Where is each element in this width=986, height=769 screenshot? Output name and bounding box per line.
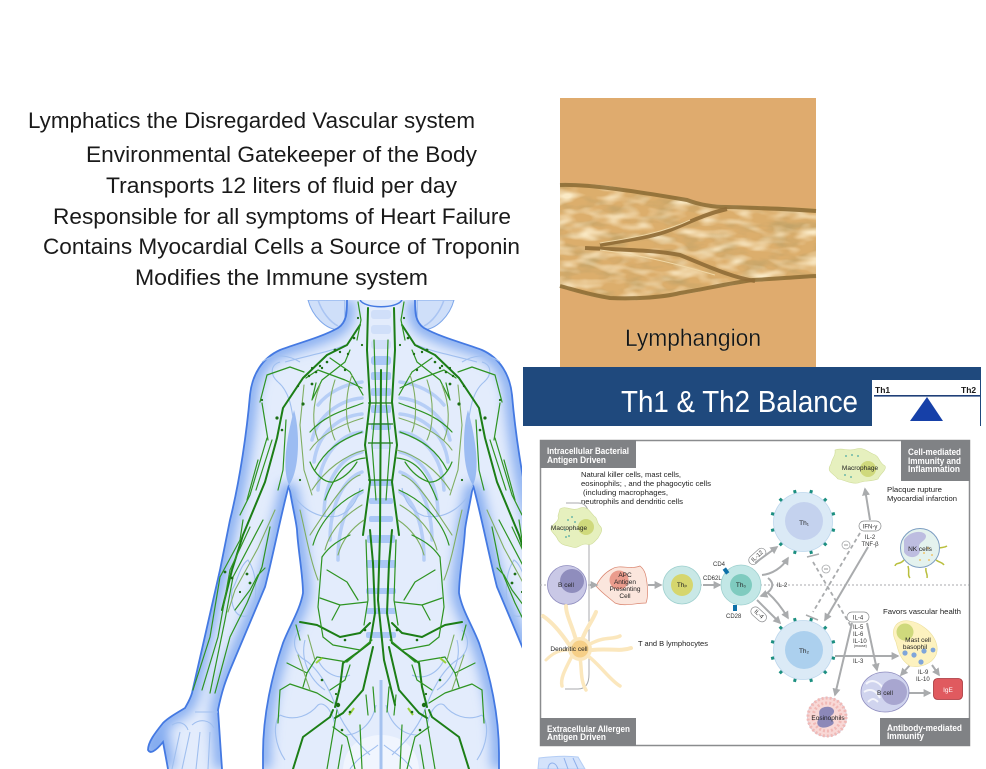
header: cell-mediated — [901, 440, 970, 481]
white panel behind immune chart — [522, 426, 986, 757]
note: innate cells: (including macrophages, — [583, 488, 668, 497]
note: plaque rupture: Placque rupture — [887, 485, 942, 494]
cell: eosinophils — [808, 698, 846, 736]
note: vascular health: Favors vascular health — [883, 607, 961, 616]
cell: macrophage right — [829, 449, 885, 483]
cell: Th0: Th₀ — [736, 582, 746, 589]
cell: Th1 — [771, 490, 835, 554]
skeleton — [172, 310, 522, 769]
cell: Th2: Th₂ — [799, 648, 810, 655]
icon: balance scale: Th1 — [875, 385, 890, 395]
header: cell-mediated: Inflammation — [908, 464, 960, 474]
illustration: female body with lymphatic system — [147, 300, 522, 769]
header: intracellular: Intracellular Bacterial — [547, 446, 629, 456]
cell: dendritic — [543, 606, 631, 690]
arrows: cytokine outputs — [825, 489, 939, 695]
pill: IL-4: IL-4 — [752, 609, 765, 621]
box: IgE — [934, 678, 962, 700]
caption: Lymphangion — [625, 325, 761, 352]
header: cell-mediated: Immunity and — [908, 456, 961, 466]
cell: antigen presenting: Presenting — [609, 586, 641, 593]
cell: Th0: CD28 — [726, 614, 742, 620]
midline — [540, 584, 969, 586]
arrows: Th0 to Th1 and Th2: IL-2 — [777, 583, 788, 589]
banner: Th1 and Th2 balance — [523, 367, 981, 426]
header: cell-mediated: Cell-mediated — [908, 447, 961, 457]
pill: IL-12 — [747, 546, 768, 566]
cell: macrophage left — [551, 508, 602, 547]
pill: IFN-gamma: IFN-γ — [863, 524, 877, 530]
cell: antigen presenting — [596, 566, 648, 605]
cell: Th2 — [771, 618, 835, 682]
cell: B cell left — [548, 566, 586, 604]
cell: NK — [895, 528, 947, 578]
vessel — [560, 183, 816, 300]
function: immune system: Modifies the Immune system — [135, 265, 428, 290]
cell: B cell right — [861, 672, 909, 712]
pill: IL-12: IL-12 — [751, 549, 765, 564]
arrows: Th0 to Th1 and Th2 — [755, 547, 788, 623]
label: CD62L: CD62L — [703, 576, 722, 582]
header: antibody-mediated: Antibody-mediated — [887, 723, 962, 733]
cell: antigen presenting: Cell — [619, 593, 631, 600]
cell: mast cell basophil — [893, 621, 937, 683]
pill: IFN-gamma — [859, 521, 881, 548]
cell: dendritic: Dendritic cell — [550, 646, 588, 653]
cell: antigen presenting: Antigen — [614, 579, 636, 586]
function: heart failure: Responsible for all symptoms of Heart Failure — [53, 204, 511, 229]
box: IgE: IgE — [943, 687, 954, 694]
body silhouette — [147, 300, 522, 769]
pill: IFN-gamma: IL-2 — [865, 535, 876, 541]
header: extracellular: Extracellular Allergen — [547, 724, 630, 734]
icon: balance scale: Th2 — [961, 385, 976, 395]
pill: IL-4 — [749, 605, 768, 624]
hair — [308, 300, 454, 330]
note: plaque rupture — [887, 485, 957, 503]
heading and list of lymphatic functions — [28, 108, 520, 290]
cell: Th0 — [713, 562, 761, 620]
header: intracellular: Antigen Driven — [547, 455, 606, 465]
cell: macrophage left: Macrophage — [551, 525, 587, 532]
pill: IL-4 and cytokines: (mouse) — [854, 644, 867, 648]
arrow: to APC — [590, 584, 597, 586]
icon: balance scale — [872, 380, 980, 426]
header: extracellular: Antigen Driven — [547, 732, 606, 742]
cell: Thp — [663, 566, 701, 604]
pill: IL-4 and cytokines: IL-10 — [853, 639, 867, 645]
header: antibody-mediated: Immunity — [887, 731, 924, 741]
header: extracellular — [540, 718, 636, 746]
heading: Lymphatics the Disregarded Vascular system — [28, 108, 475, 133]
lymphatic vessels — [192, 301, 522, 769]
pill: IL-4 and cytokines: IL-3 — [853, 659, 864, 665]
note: innate cells: Natural killer cells, mast cells, — [581, 470, 681, 479]
dashed inhibitory pathways — [806, 533, 860, 628]
arrow: APC to Thp — [648, 584, 661, 586]
banner title: Th1 & Th2 Balance — [621, 384, 858, 419]
pill: IL-4 and cytokines: IL-4 — [853, 616, 864, 622]
note: innate cells: neutrophils and dendritic cells — [581, 497, 683, 506]
header: intracellular — [540, 440, 636, 468]
cell: mast cell basophil: basophil — [903, 644, 928, 651]
cell: Thp: Thₚ — [677, 582, 687, 589]
note: plaque rupture: Myocardial infarction — [887, 494, 957, 503]
note: innate cells: eosinophils; , and the phagocytic cells — [581, 479, 711, 488]
cell: NK: NK cells — [908, 546, 933, 553]
bracket — [565, 503, 589, 689]
pill: IFN-gamma: TNF-β — [861, 542, 879, 548]
cell: mast cell basophil: IL-9 — [918, 670, 929, 676]
header: antibody-mediated — [880, 718, 970, 746]
function: gatekeeper: Environmental Gatekeeper of the Body — [86, 142, 478, 167]
note: innate cells — [581, 470, 711, 506]
pill: IL-4 and cytokines: IL-5 — [853, 625, 864, 631]
cell: B cell right: B cell — [877, 690, 893, 697]
note: lymphocytes: T and B lymphocytes — [638, 639, 708, 648]
function: troponin: Contains Myocardial Cells a Source of Troponin — [43, 234, 520, 259]
cell: B cell left: B cell — [558, 582, 574, 589]
cell: macrophage right: Macrophage — [842, 465, 878, 472]
panel: lymphangion micrograph — [560, 98, 816, 367]
arrow: Thp to Th0 — [703, 584, 720, 586]
cell: Th0: CD4 — [713, 562, 726, 568]
pill: IL-4 and cytokines — [847, 612, 869, 665]
cell: mast cell basophil: IL-10 — [916, 677, 930, 683]
function: fluid transport: Transports 12 liters of fluid per day — [106, 173, 458, 198]
panel: immune response chart — [540, 440, 970, 746]
cell: eosinophils: Eosinophils — [811, 715, 845, 722]
cell: mast cell basophil: Mast cell — [905, 637, 931, 644]
pill: IL-4 and cytokines: IL-6 — [853, 632, 864, 638]
cell: Th1: Th₁ — [799, 520, 810, 527]
right hand fragment below chart — [538, 756, 585, 769]
cell: antigen presenting: APC — [618, 572, 632, 579]
